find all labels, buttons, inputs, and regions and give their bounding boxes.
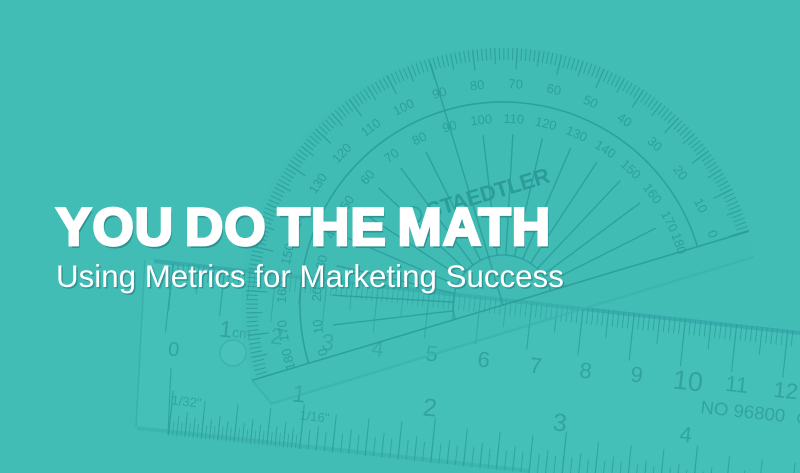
inner scale labels: 10 [309, 319, 326, 335]
outer scale labels: 120 [329, 140, 355, 166]
inner scale labels: 20 [309, 287, 325, 302]
ruler [136, 260, 800, 473]
outer scale labels: 60 [545, 80, 563, 98]
ruler numbers: 1 [291, 380, 307, 409]
outer degree ticks [190, 0, 743, 377]
inner scale labels: 100 [470, 111, 493, 128]
inner scale labels: 50 [337, 192, 357, 213]
inch ticks [168, 368, 800, 473]
inner scale labels: 170 [658, 208, 681, 234]
ruler numbers: 3 [320, 328, 336, 356]
ruler numbers: 1/32" [171, 393, 203, 411]
ruler numbers: 7 [528, 352, 543, 379]
outer scale labels: 180 [278, 347, 298, 372]
ruler numbers: 1/16" [299, 408, 331, 426]
outer scale labels: 140 [288, 204, 311, 230]
ruler numbers: NO 96800 [700, 397, 786, 426]
outer scale labels: 20 [670, 162, 691, 183]
inner scale labels: 90 [440, 117, 458, 136]
outer scale labels: 10 [691, 196, 711, 215]
outer scale labels: 100 [390, 96, 417, 119]
brand name: STAEDTLER [424, 163, 553, 223]
inner scale labels: 70 [381, 145, 402, 166]
protractor body [178, 0, 756, 407]
brand logo [403, 205, 423, 225]
inner scale labels: 110 [503, 111, 525, 127]
inner arc [250, 52, 697, 363]
ruler numbers: 0 [167, 339, 180, 362]
protractor lower edge [252, 232, 754, 407]
inner scale labels: 0 [314, 347, 331, 358]
inner scale labels [261, 63, 690, 363]
ruler edges [136, 260, 800, 471]
outer scale labels [218, 20, 723, 372]
outer scale labels: 130 [306, 170, 330, 197]
ruler numbers: 2 [421, 393, 438, 423]
inner scale labels: 40 [322, 222, 341, 241]
outer scale labels: 160 [274, 281, 290, 304]
title: YOU DO THE MATH [56, 198, 551, 257]
ruler numbers: 11 [724, 371, 749, 398]
inner scale labels: 80 [409, 128, 429, 148]
radial lines [269, 15, 664, 353]
outer scale labels: 170 [274, 319, 292, 342]
outer scale labels: 90 [430, 84, 448, 102]
inner scale labels: 160 [640, 180, 665, 207]
outer scale labels: 40 [614, 110, 635, 130]
outer scale labels: 80 [469, 77, 485, 93]
inner scale labels: 120 [534, 114, 558, 133]
outer scale labels: 70 [508, 76, 523, 92]
ruler numbers: 3 [551, 408, 568, 438]
outer scale labels: 110 [358, 115, 383, 140]
ruler numbers: cm [231, 324, 252, 342]
ruler hole [220, 340, 246, 366]
outer scale labels: 150 [278, 242, 297, 266]
protractor baseline [252, 231, 748, 380]
outer scale labels: 0 [705, 228, 721, 240]
subtitle: Using Metrics for Marketing Success [56, 259, 564, 294]
protractor [178, 0, 756, 407]
inner scale labels: 60 [357, 167, 378, 188]
ruler numbers: 12 [772, 377, 799, 404]
ruler body [136, 260, 800, 473]
ruler numbers [167, 315, 800, 448]
ruler numbers: 5 [424, 340, 439, 367]
inner scale labels: 180 [668, 231, 690, 256]
ruler numbers: 8 [578, 357, 593, 384]
inner scale labels: 130 [564, 123, 590, 145]
ruler numbers: 1 [218, 315, 234, 343]
ruler numbers: 10 [671, 365, 704, 398]
ruler numbers: 6 [476, 346, 491, 373]
outer scale labels: 50 [581, 92, 600, 111]
ruler numbers: 4 [370, 335, 385, 362]
inner scale labels: 30 [313, 253, 330, 271]
outer scale labels: 30 [645, 133, 665, 154]
ruler numbers: 4 [678, 421, 693, 448]
centimetre ticks [165, 263, 796, 400]
ruler numbers: 9 [629, 361, 644, 388]
centre arc [441, 243, 551, 319]
ruler numbers: 2 [269, 322, 285, 350]
inner scale labels: 150 [618, 156, 644, 182]
inner scale labels: 140 [592, 137, 619, 161]
